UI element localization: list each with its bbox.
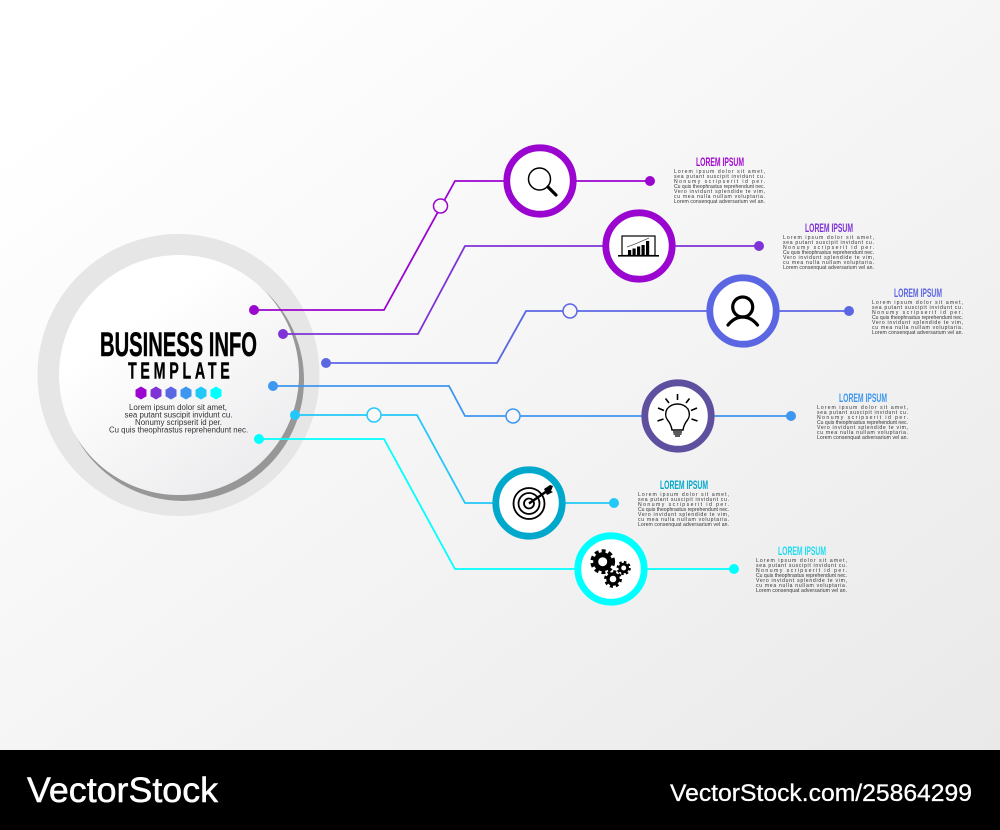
text block 5: Cu quis theophrastus reprehendunt nec. [638,507,729,513]
text block 1: LOREM IPSUM [696,155,744,169]
text block 4: Nonumy scripserit id per. [817,415,908,421]
text block 1: Lorem consenquat adversarium vel an. [674,199,765,205]
icon: target [514,485,553,519]
hexagon row [136,386,222,400]
text block 2 [783,221,874,271]
text block 4: LOREM IPSUM [839,391,887,405]
main description [109,403,248,434]
text block 5: cu mea nulla nullam voluptaria. [638,517,729,523]
node: chart [606,213,672,279]
text block 6: LOREM IPSUM [778,544,826,558]
connector 2 [278,241,764,339]
text block 3 [872,286,963,336]
connector 4 [268,381,796,423]
main description: Lorem ipsum dolor sit amet, [129,403,227,412]
icon: light bulb [658,394,698,436]
text block 1: Vero invidunt splendide te vim, [674,189,765,195]
node: idea [645,383,711,449]
icon: person [728,297,758,325]
text block 6: Vero invidunt splendide te vim, [756,578,847,584]
text block 1: Nonumy scripserit id per. [674,179,765,185]
text block 2: Nonumy scripserit id per. [783,245,874,251]
text block 4: Vero invidunt splendide te vim, [817,425,908,431]
text block 3: Lorem consenquat adversarium vel an. [872,330,963,336]
text block 6 [756,544,847,594]
main description: sea putant suscipit invidunt cu. [124,410,232,420]
main description: Cu quis theophrastus reprehendunt nec. [109,426,248,434]
text block 2: Lorem ipsum dolor sit amet, [783,235,874,241]
text block 6: Lorem consenquat adversarium vel an. [756,588,847,594]
text block 6: cu mea nulla nullam voluptaria. [756,583,847,589]
text block 4: Cu quis theophrastus reprehendunt nec. [817,420,908,426]
text block 3: Nonumy scripserit id per. [872,310,963,316]
title: BUSINESS INFO [100,326,257,364]
text block 2: sea putant suscipit invidunt cu. [783,240,874,246]
footer url: VectorStock.com/25864299 [670,780,972,807]
text block 5: Lorem ipsum dolor sit amet, [638,492,729,498]
text block 3: cu mea nulla nullam voluptaria. [872,325,963,331]
subtitle: TEMPLATE [128,359,234,385]
text block 5 [638,478,729,528]
connector 6 [254,434,739,574]
text block 5: Nonumy scripserit id per. [638,502,729,508]
node: search [507,148,573,214]
text block 3: Cu quis theophrastus reprehendunt nec. [872,315,963,321]
text block 6: Lorem ipsum dolor sit amet, [756,558,847,564]
text block 6: Cu quis theophrastus reprehendunt nec. [756,573,847,579]
connector 1 [249,176,655,315]
text block 1 [674,155,765,205]
text block 6: sea putant suscipit invidunt cu. [756,563,847,569]
text block 2: cu mea nulla nullam voluptaria. [783,260,874,266]
footer logo: VectorStock [27,771,219,810]
text block 4 [817,391,908,441]
text block 4: Lorem consenquat adversarium vel an. [817,435,908,441]
text block 6: Nonumy scripserit id per. [756,568,847,574]
connector 5 [290,408,619,508]
main description: Nonumy scripserit id per. [135,418,222,427]
text block 4: cu mea nulla nullam voluptaria. [817,430,908,436]
text block 4: sea putant suscipit invidunt cu. [817,410,908,416]
text block 5: LOREM IPSUM [660,478,708,492]
text block 2: Cu quis theophrastus reprehendunt nec. [783,250,874,256]
text block 3: Vero invidunt splendide te vim, [872,320,963,326]
text block 2: Vero invidunt splendide te vim, [783,255,874,261]
text block 2: Lorem consenquat adversarium vel an. [783,265,874,271]
icon: laptop chart [618,236,659,257]
text block 3: sea putant suscipit invidunt cu. [872,305,963,311]
node: target [496,470,562,536]
icon: gears [592,551,630,587]
text block 5: Lorem consenquat adversarium vel an. [638,522,729,528]
connector 3 [321,304,854,368]
text block 1: cu mea nulla nullam voluptaria. [674,194,765,200]
node: user [710,278,776,344]
main circle [38,234,320,516]
text block 3: LOREM IPSUM [894,286,942,300]
text block 1: Cu quis theophrastus reprehendunt nec. [674,184,765,190]
text block 2: LOREM IPSUM [805,221,853,235]
icon: magnifier [528,168,556,195]
text block 1: Lorem ipsum dolor sit amet, [674,169,765,175]
node: settings [578,536,644,602]
text block 5: sea putant suscipit invidunt cu. [638,497,729,503]
footer bar [0,750,1000,830]
text block 4: Lorem ipsum dolor sit amet, [817,405,908,411]
text block 5: Vero invidunt splendide te vim, [638,512,729,518]
text block 3: Lorem ipsum dolor sit amet, [872,300,963,306]
text block 1: sea putant suscipit invidunt cu. [674,174,765,180]
